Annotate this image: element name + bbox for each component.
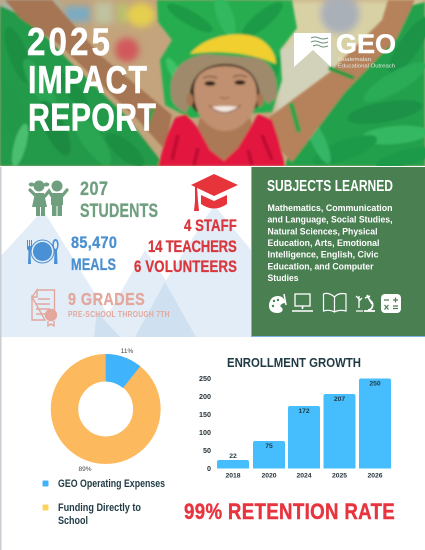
y axis labels <box>199 374 211 473</box>
bar chart: enrollment growth <box>199 355 391 480</box>
bars <box>217 378 391 468</box>
x axis labels: 2024 <box>296 472 312 480</box>
staff figures: 6 VOLUNTEERS <box>134 258 237 276</box>
page left edge <box>0 337 2 550</box>
logo: GEO: GEO <box>336 29 396 59</box>
right arm <box>268 0 415 162</box>
bar values <box>229 380 381 460</box>
hair <box>190 64 260 112</box>
students figure <box>80 178 158 222</box>
meals figure <box>71 234 117 275</box>
hero photo: smiling child in green feathered costume <box>0 0 425 173</box>
icon: palette <box>269 294 286 313</box>
logo: GEO <box>294 29 396 70</box>
x axis labels: 2018 <box>225 472 241 480</box>
y axis labels: 150 <box>199 410 211 419</box>
subjects list: Natural Sciences, Physical <box>268 226 378 236</box>
bar values: 22 <box>229 453 237 460</box>
y axis labels: 250 <box>199 374 211 383</box>
grades figure: PRE-SCHOOL THROUGH 7TH <box>68 309 170 319</box>
hat crown <box>190 34 276 64</box>
wristbands <box>329 68 354 78</box>
grades figure: 9 GRADES <box>68 290 145 309</box>
x axis labels <box>225 472 383 480</box>
feather crown <box>157 0 297 118</box>
students figure: 207 <box>80 178 108 199</box>
meals figure: MEALS <box>71 255 116 275</box>
red feather boa <box>158 114 285 166</box>
hat brim <box>171 54 277 113</box>
meals figure: 85,470 <box>71 234 117 252</box>
subjects list: Studies <box>268 273 299 283</box>
subjects list: Education, Arts, Emotional <box>268 238 380 248</box>
icon: science plant and microscope <box>356 295 375 311</box>
x axis labels: 2020 <box>261 472 277 480</box>
x axis labels: 2026 <box>367 472 383 480</box>
title: IMPACT <box>28 58 147 102</box>
face <box>194 66 257 131</box>
bar values: 207 <box>334 396 345 403</box>
bar values: 250 <box>369 380 381 388</box>
subjects list <box>268 203 392 283</box>
logo: GEO: Guatemalan <box>338 57 371 63</box>
y axis labels: 0 <box>207 464 211 473</box>
bar values: 172 <box>298 408 310 415</box>
left wing <box>0 6 165 166</box>
donut chart: expenses: 89% <box>78 466 92 473</box>
donut chart: expenses: 11% <box>121 348 133 355</box>
staff figures: 4 STAFF <box>184 217 237 235</box>
icon: computer <box>292 294 313 311</box>
donut chart: expenses <box>64 348 147 473</box>
donut legend <box>42 478 165 527</box>
title <box>27 19 156 139</box>
x axis labels: 2025 <box>332 472 347 480</box>
icon: certificate <box>32 290 56 326</box>
subjects list: Intelligence, English, Civic <box>268 250 379 260</box>
subjects list: and Language, Social Studies, <box>268 215 392 225</box>
icon: open book <box>324 293 346 312</box>
smile <box>212 106 238 113</box>
retention rate callout: 99% RETENTION RATE <box>184 501 395 524</box>
donut legend: School <box>58 515 88 527</box>
y axis labels: 50 <box>203 446 211 455</box>
staff figures: 14 TEACHERS <box>148 238 237 256</box>
bar values: 75 <box>265 443 273 450</box>
y axis labels: 100 <box>199 428 211 437</box>
left arm <box>5 0 172 150</box>
title: REPORT <box>28 96 156 139</box>
subjects list: Mathematics, Communication <box>268 203 392 213</box>
staff figures <box>134 217 237 276</box>
chart heading: ENROLLMENT GROWTH <box>227 355 361 370</box>
donut legend: GEO Operating Expenses <box>58 478 165 490</box>
grades figure <box>68 290 170 319</box>
subjects list: Education, and Computer <box>268 261 374 271</box>
panel: key statistics with mountain background <box>0 167 251 337</box>
panel: subjects learned <box>251 167 425 337</box>
logo: GEO: Educational Outreach <box>338 64 395 70</box>
eyes <box>204 81 216 86</box>
right wing <box>285 2 425 166</box>
donut legend: Funding Directly to <box>58 502 141 514</box>
y axis labels: 200 <box>199 392 211 401</box>
icon: children <box>29 180 67 216</box>
icon: plate and cutlery <box>27 239 59 264</box>
chest and neck <box>196 118 254 161</box>
icon: graduation cap <box>191 174 238 211</box>
icon: calculator <box>381 294 401 313</box>
title: 2025 <box>27 19 110 64</box>
students figure: STUDENTS <box>80 200 158 222</box>
